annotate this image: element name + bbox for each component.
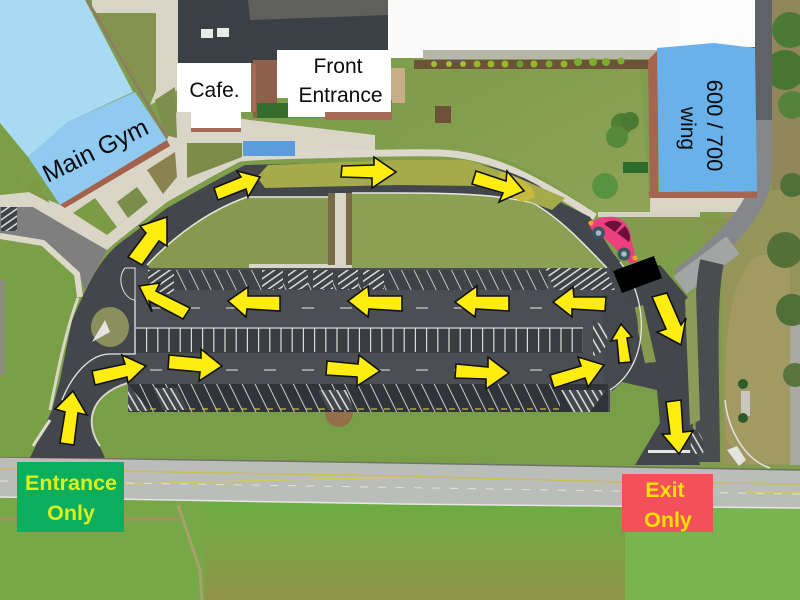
icon: pink car xyxy=(588,217,638,263)
panel: back parking and roof xyxy=(178,0,755,156)
barrier: black block xyxy=(613,256,662,293)
arrow: lower lane 4 xyxy=(550,357,604,388)
arrow: turn up right end xyxy=(611,324,632,363)
panel: parking lot xyxy=(33,262,704,454)
panel: roads and drive asphalt xyxy=(30,0,762,465)
sign: exit only: Exit xyxy=(645,478,685,502)
panel: left side lawn and access road xyxy=(0,120,107,457)
panel: right side lawn and trees xyxy=(722,0,800,468)
arrow: exit lane upper xyxy=(652,293,686,345)
panel: cafeteria building xyxy=(177,63,256,132)
arrows: yellow traffic flow xyxy=(55,157,693,454)
heading: wing: wing xyxy=(676,106,699,150)
arrow: loop up xyxy=(128,217,167,265)
sign: exit only: Only xyxy=(644,508,692,532)
panel: front entrance building xyxy=(277,50,392,120)
panel: aerial base of fields and road xyxy=(0,457,800,600)
panel: main gym building xyxy=(0,0,170,208)
arrow: exit lane lower xyxy=(662,400,693,454)
arrow: entrance up xyxy=(55,391,87,445)
panel: yellow highlighted drop-off lane xyxy=(257,160,565,210)
arrow: upper lane 1 xyxy=(553,287,606,317)
arrow: upper lane 4 xyxy=(228,287,280,317)
arrow: lower lane 1 xyxy=(168,349,222,381)
arrow: upper lane diagonal xyxy=(139,283,190,319)
heading: Front Entrance: Front xyxy=(313,55,363,78)
heading: Front Entrance: Entrance xyxy=(298,84,383,107)
heading: Main Gym: Main Gym xyxy=(38,113,153,188)
sign: exit only xyxy=(622,474,713,532)
arrow: lot entry right xyxy=(92,355,146,385)
arrow: drop-off lane 2 xyxy=(472,171,524,202)
sign: entrance only: Only xyxy=(47,501,95,525)
panel: 600/700 wing building xyxy=(648,43,757,198)
arrow: loop right xyxy=(214,171,260,200)
heading: Cafe.: Cafe. xyxy=(189,79,240,102)
arrow: drop-off lane 1 xyxy=(341,157,396,188)
sign: entrance only: Entrance xyxy=(25,471,117,495)
arrow: upper lane 2 xyxy=(455,286,509,317)
arrow: lower lane 3 xyxy=(455,357,509,389)
panel: top lawns and sidewalk xyxy=(0,0,752,262)
heading: 600 / 700: 600 / 700 xyxy=(702,80,727,171)
arrow: upper lane 3 xyxy=(348,286,402,317)
panel: inner lawns xyxy=(92,193,700,465)
sign: entrance only xyxy=(17,462,124,532)
arrow: lower lane 2 xyxy=(326,355,380,386)
